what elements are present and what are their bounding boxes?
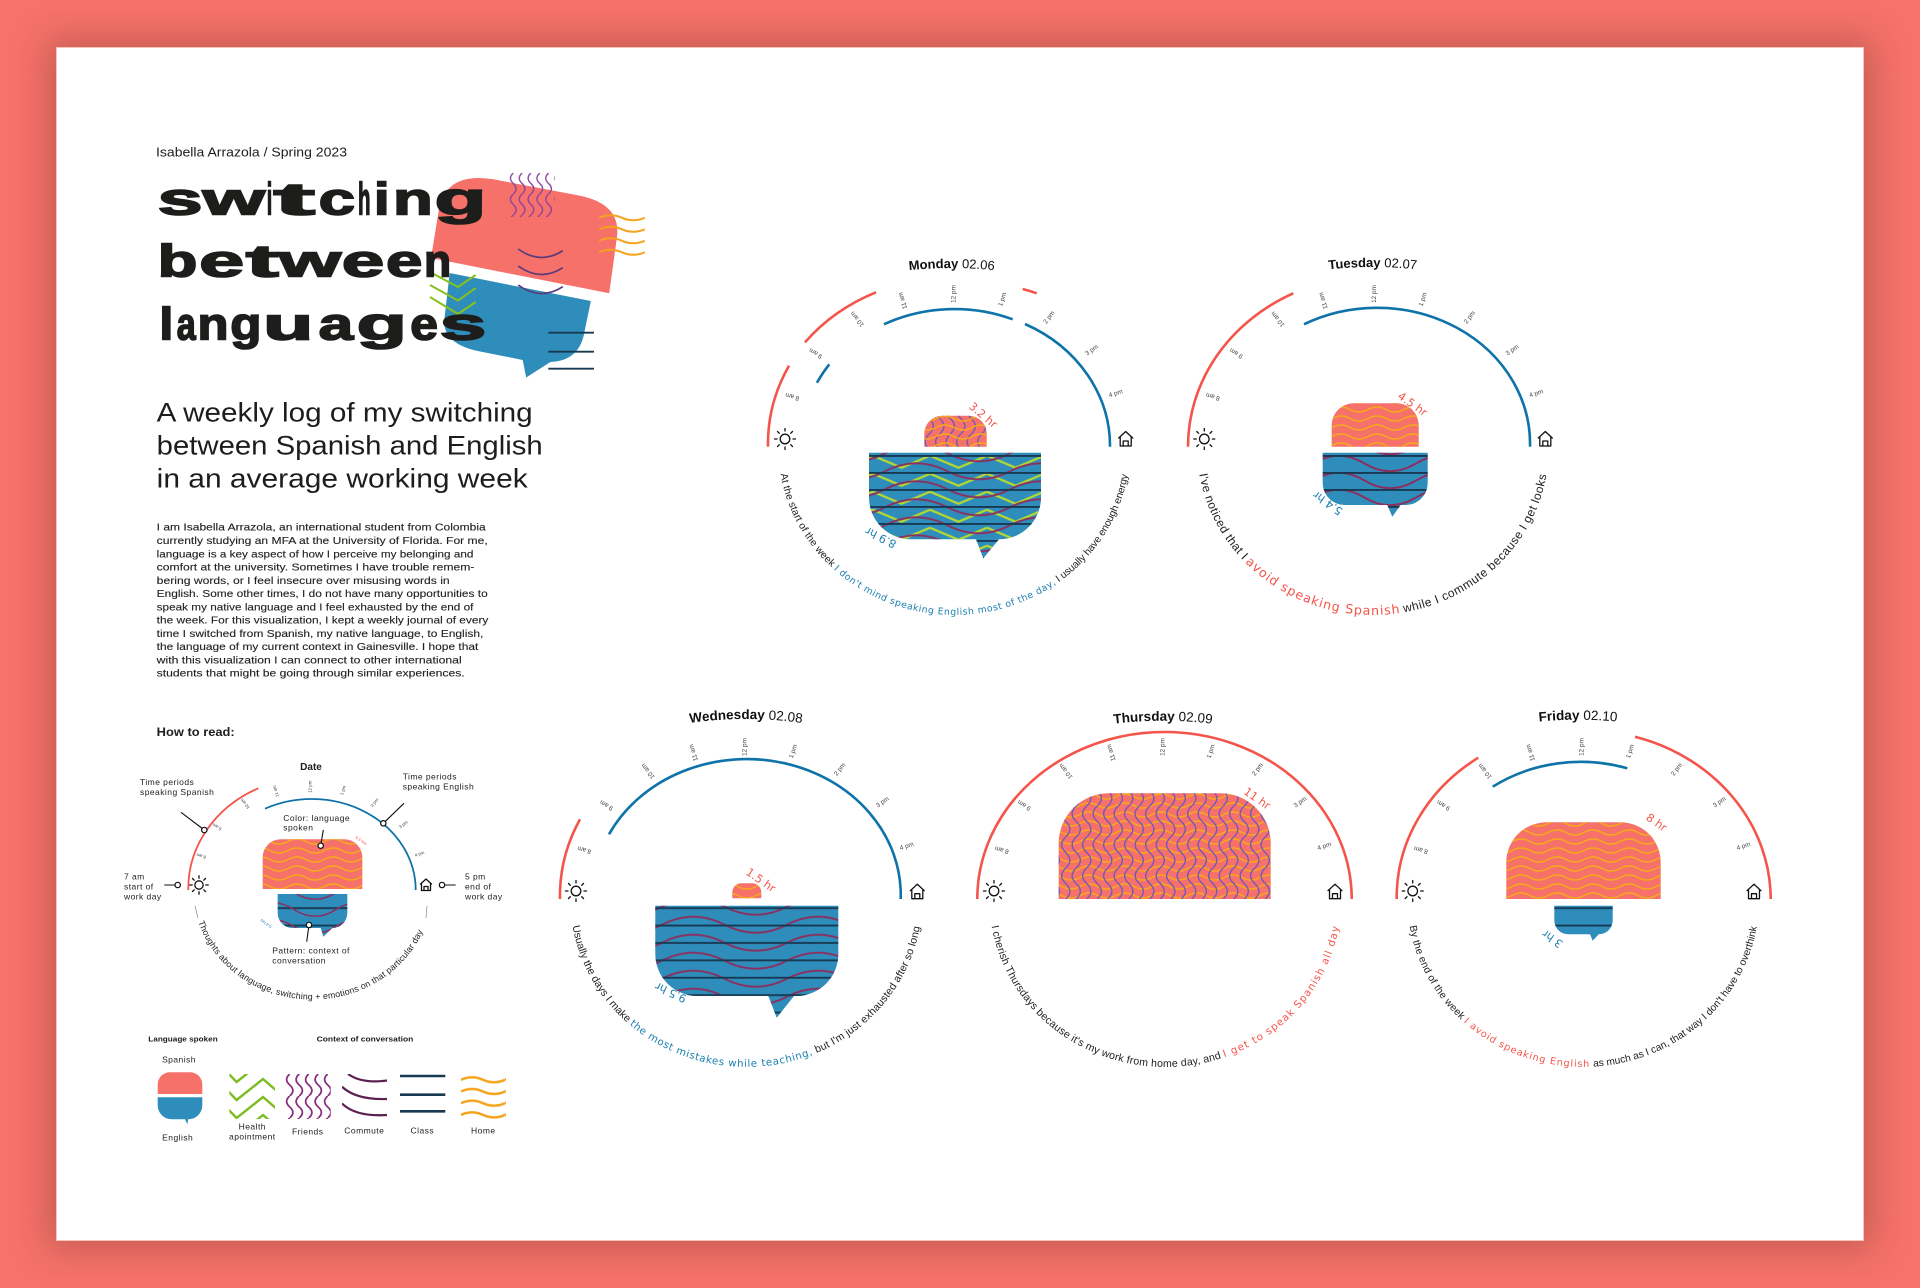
title: e [410, 298, 438, 349]
sample hour labels: 2 pm [370, 797, 380, 808]
value: Spanish: 1.5 hr [743, 866, 778, 895]
legend: context of conversation: Context of conversation [317, 1035, 414, 1044]
hour labels: 8 am [1205, 391, 1221, 402]
subtitle: A weekly log of my switching [157, 398, 533, 428]
swatch: health: Health [239, 1122, 266, 1132]
hour labels: 9 am [808, 346, 824, 360]
intro paragraph: time I switched from Spanish, my native language, to English, [157, 628, 483, 640]
icon: home [1538, 432, 1552, 446]
title graphic: speech bubbles and pattern swatches [430, 173, 645, 378]
hour labels: 1 pm [788, 744, 799, 759]
value: English: 9.5 hr [653, 979, 689, 1005]
intro paragraph: bering words, or I feel insecure over misusing words in [157, 575, 450, 587]
tiny hour values [259, 835, 368, 929]
hour labels: 2 pm [833, 762, 847, 777]
icon: home [910, 884, 924, 899]
hour labels: 10 am [1270, 310, 1286, 328]
title: n [424, 236, 451, 287]
time arc [977, 732, 1352, 899]
title: i [267, 173, 272, 224]
title: u [263, 298, 313, 349]
sample hour labels: 3 pm [398, 819, 409, 829]
title: t [246, 236, 279, 287]
value: Spanish: 11 hr [1241, 785, 1273, 813]
bubble: Spanish hours [1506, 822, 1661, 899]
bubble: English hours [869, 453, 1041, 558]
heading: how to read: How to read: [157, 727, 235, 739]
hour labels: 9 am [1017, 798, 1032, 812]
hour labels: 3 pm [1712, 795, 1728, 809]
hour labels: 8 am [1413, 844, 1429, 855]
value: Spanish: 3.2 hr [966, 400, 1000, 431]
swatch: friends [285, 1074, 331, 1137]
icon: sun [984, 880, 1004, 902]
sample arcs [188, 788, 416, 890]
time arcs [1397, 737, 1771, 899]
value: English: 3 hr [1539, 927, 1565, 950]
intro paragraph: English. Some other times, I do not have many opportunities to [157, 588, 488, 600]
hour labels: 8 am [994, 844, 1010, 855]
bubble: English hours [655, 906, 838, 1018]
subtitle [157, 398, 543, 493]
bubble: Spanish hours [1332, 403, 1419, 447]
icon: sun [1402, 880, 1423, 902]
subtitle: in an average working week [157, 463, 529, 493]
sample hour labels: 11 am [271, 784, 280, 798]
callout: Spanish periods: speaking Spanish [140, 787, 214, 797]
icon: sun [774, 428, 796, 450]
title: a [177, 298, 196, 349]
time arcs [560, 759, 901, 899]
swatch: commute [342, 1074, 387, 1135]
sample hour labels: 10 am [239, 797, 251, 810]
intro paragraph: the week. For this visualization, I kept a weekly journal of every [157, 615, 489, 627]
bubble: English hours [1554, 906, 1613, 941]
title: w [277, 236, 343, 287]
value: English: 8.9 hr [863, 524, 899, 551]
date: Thursday: Thursday 02.09 [1113, 711, 1212, 724]
title: s [158, 173, 203, 224]
intro paragraph: the language of my current context in Gainesville. I hope that [157, 641, 478, 653]
panel: Wednesday [558, 709, 925, 1067]
hour labels: 11 am [688, 743, 700, 762]
hour labels: 1 pm [997, 292, 1008, 307]
hour labels: 2 pm [1463, 310, 1477, 325]
callout: end of work day: work day [464, 891, 503, 901]
title: e [386, 236, 422, 287]
sample hour labels: 12 pm [307, 780, 312, 793]
sample hour labels: 9 am [211, 822, 222, 832]
callout: end of work day [464, 872, 503, 901]
hour labels: 11 am [1318, 291, 1330, 310]
icon: home [1119, 432, 1133, 446]
date label: Date [300, 762, 322, 773]
curved thought: I cherish Thursdays because it's my work from home day, and I get to speak Spanish all day [992, 926, 1340, 1067]
swatch: friends: Friends [292, 1127, 323, 1137]
legend: language spoken: English [162, 1133, 193, 1143]
callout: pattern: conversation [272, 955, 326, 965]
intro paragraph: speak my native language and I feel exhausted by the end of [157, 601, 473, 613]
hour labels: 12 pm [1160, 738, 1166, 756]
swatch: class [400, 1076, 445, 1135]
value: Spanish: 4.5 hr [1395, 390, 1430, 419]
hour labels: 4 pm [1529, 388, 1544, 399]
callout: English periods [403, 771, 474, 791]
hour labels [785, 285, 1124, 402]
time arcs [1188, 293, 1530, 447]
legend: context of conversation [222, 1035, 506, 1142]
bubble: English hours [1323, 453, 1428, 517]
hour labels: 3 pm [1505, 343, 1520, 357]
title: b [158, 236, 198, 287]
swatch: health: apointment [229, 1132, 276, 1142]
intro paragraph [156, 522, 489, 680]
title: n [393, 173, 433, 224]
swatch: home [461, 1074, 506, 1135]
hour labels: 12 pm [950, 285, 957, 303]
bubble: Spanish hours [1059, 793, 1271, 899]
legend: language spoken [148, 1035, 218, 1143]
title: g [357, 298, 407, 349]
value: English: 5.4 hr [1310, 488, 1345, 518]
title: a [319, 298, 355, 349]
hour labels: 10 am [640, 762, 657, 780]
curved note: Thoughts about language, switching + emotions on that particular day [199, 920, 424, 1002]
hour labels [1205, 285, 1544, 402]
date: Tuesday: Tuesday 02.07 [1328, 258, 1417, 270]
legend: language spoken: Spanish [162, 1055, 196, 1065]
hour labels [994, 738, 1332, 855]
intro paragraph: language is a key aspect of how I perceive my belonging and [157, 548, 474, 560]
callout: start of work day [123, 872, 162, 901]
title: g [230, 298, 262, 349]
intro paragraph: with this visualization I can connect to other international [156, 654, 462, 666]
intro paragraph: currently studying an MFA at the University of Florida. For me, [157, 535, 488, 547]
hour labels: 12 pm [1579, 738, 1586, 756]
callout: English periods: Time periods [403, 771, 457, 781]
hour labels: 1 pm [1418, 292, 1429, 307]
title: l [159, 298, 173, 349]
sample bubble: English [278, 894, 347, 937]
date: Wednesday: Wednesday 02.08 [688, 709, 802, 723]
title: e [342, 236, 384, 287]
title: s [440, 298, 486, 349]
hour labels: 10 am [849, 310, 866, 328]
callout: end of work day: 5 pm [465, 872, 486, 882]
callout: Spanish periods: Time periods [140, 777, 194, 787]
swatch: home: Home [471, 1125, 496, 1135]
swatch: commute: Commute [344, 1125, 384, 1135]
hour labels [1413, 738, 1751, 855]
hour labels: 4 pm [1108, 388, 1124, 399]
title [158, 173, 486, 349]
hour labels: 2 pm [1670, 762, 1684, 777]
title: i [374, 173, 390, 224]
hour labels [577, 738, 915, 855]
hour labels: 10 am [1058, 762, 1074, 780]
date: Friday: Friday 02.10 [1539, 710, 1617, 722]
hour labels: 3 pm [1293, 795, 1308, 809]
icon: home [1747, 884, 1761, 899]
subtitle: between Spanish and English [157, 430, 543, 460]
hour labels: 3 pm [875, 795, 891, 809]
legend: language spoken: Language spoken [148, 1035, 218, 1044]
curved thought: Usually the days I make the most mistakes while teaching, but I'm just exhausted after so long [573, 925, 922, 1067]
panel: how to read [123, 727, 503, 1002]
icon: sun [1194, 428, 1215, 450]
hour labels: 11 am [1525, 743, 1537, 762]
panel: Tuesday [1186, 258, 1553, 617]
swatch: class: Class [411, 1125, 434, 1135]
hour labels: 12 pm [1371, 285, 1378, 303]
callout: Spanish periods [140, 777, 214, 797]
hour labels: 1 pm [1206, 744, 1217, 759]
hour labels: 1 pm [1625, 744, 1636, 759]
title: n [198, 298, 228, 349]
hour labels: 10 am [1477, 762, 1494, 780]
hour labels: 9 am [1436, 798, 1452, 812]
intro paragraph: comfort at the university. Sometimes I have trouble remem- [157, 562, 475, 574]
title: g [434, 173, 486, 224]
icon: sun [190, 876, 208, 894]
hour labels: 4 pm [1736, 841, 1751, 852]
callout: colour [283, 813, 350, 833]
intro paragraph: students that might be going through similar experiences. [157, 668, 465, 680]
bubble: Spanish hours [924, 416, 987, 447]
intro paragraph: I am Isabella Arrazola, an international student from Colombia [157, 522, 486, 534]
title: w [201, 173, 267, 224]
hour labels: 4 pm [899, 841, 915, 852]
callout: end of work day: end of [465, 881, 492, 891]
hour labels: 12 pm [742, 738, 749, 756]
curved thought: At the start of the week I don't mind speaking English most of the day, I usually have enough energy [780, 474, 1130, 617]
hour labels: 9 am [599, 798, 615, 812]
title: e [199, 236, 244, 287]
bubble: Spanish hours [732, 883, 761, 898]
sample hour labels: 4 pm [414, 850, 425, 858]
panel: Friday [1395, 710, 1772, 1068]
hour labels: 11 am [897, 291, 909, 310]
curved thought: By the end of the week I avoid speaking English as much as I can, that way I don't have to overthink [1408, 926, 1757, 1068]
mini bubble [158, 1072, 202, 1124]
tiny hour values: 4.5 hrs [354, 835, 368, 846]
sample bubble: Spanish [263, 839, 362, 889]
value: Spanish: 8 hr [1644, 811, 1670, 835]
sample hour labels: 8 am [195, 852, 207, 860]
callout: pattern: Pattern: context of [272, 945, 350, 955]
panel: Monday [766, 258, 1134, 617]
hour labels: 11 am [1106, 743, 1118, 762]
icon: home [420, 879, 432, 890]
title: h [358, 173, 370, 224]
callout: colour: spoken [283, 823, 313, 833]
hour labels: 2 pm [1251, 762, 1265, 777]
sample hour labels: 1 pm [339, 785, 347, 796]
callout: start of work day: work day [123, 891, 162, 901]
hour labels: 8 am [785, 391, 800, 402]
time arcs [768, 289, 1110, 447]
hour labels: 3 pm [1084, 343, 1100, 357]
leaders and callouts [164, 803, 456, 942]
callout: start of work day: start of [124, 881, 154, 891]
credit line: Isabella Arrazola / Spring 2023 [156, 146, 347, 160]
tiny hour values: 5.4 hrs [259, 918, 273, 929]
callout: start of work day: 7 am [124, 872, 145, 882]
hour labels: 9 am [1229, 346, 1244, 360]
swatch: health [229, 1074, 276, 1141]
title: t [274, 173, 315, 224]
hour labels: 2 pm [1042, 310, 1057, 325]
panel: Thursday [976, 711, 1353, 1067]
callout: English periods: speaking English [403, 781, 474, 791]
callout: colour: Color: language [283, 813, 350, 823]
date: Monday: Monday 02.06 [909, 258, 994, 271]
icon: sun [566, 880, 586, 902]
callout: pattern [272, 945, 350, 965]
title: c [319, 173, 355, 224]
curved thought: I've noticed that I avoid speaking Spanish while I commute because I get looks [1199, 474, 1546, 617]
hour labels: 4 pm [1317, 841, 1332, 852]
hour labels: 8 am [577, 844, 592, 855]
icon: home [1328, 884, 1342, 899]
sample hour labels [195, 780, 425, 860]
